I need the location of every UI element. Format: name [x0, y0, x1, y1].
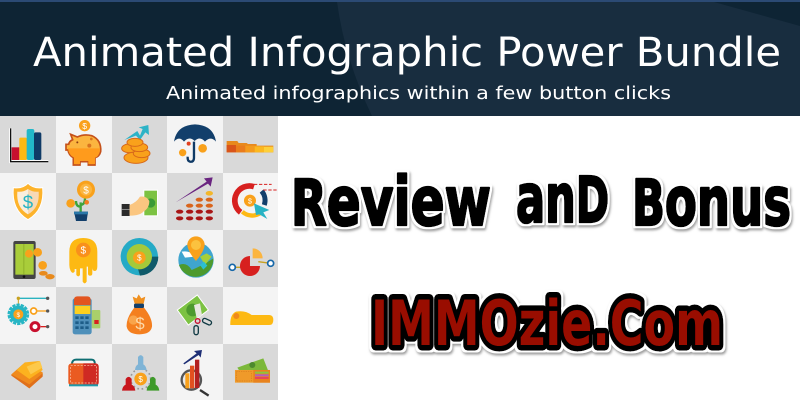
icon: gold bars	[11, 361, 43, 388]
icon: shield	[13, 183, 43, 220]
icon group: top rows	[11, 120, 277, 221]
icon: linked gears: $	[16, 312, 20, 319]
icon: hand holding money	[122, 190, 158, 216]
icon: gears cycle: $	[137, 254, 142, 263]
icon: piggy bank	[66, 120, 101, 165]
icon: magnifier and chart	[182, 350, 209, 396]
icon: growth arrow with dots	[176, 177, 213, 220]
panel: icon grid background	[0, 116, 278, 400]
icon: umbrella and coins	[174, 124, 216, 162]
icon: dripping coin: $	[81, 245, 87, 256]
heading: Review and Bonus: Review	[291, 163, 491, 242]
icon: coin plant	[66, 181, 95, 221]
icon: shield: $	[23, 191, 34, 212]
icon: piggy bank: $	[82, 121, 87, 131]
subtitle: Animated infographics within a few button clicks	[166, 83, 671, 104]
icon: phone with coins	[13, 241, 55, 279]
icon: yellow shape	[230, 311, 273, 325]
icon: dripping coin	[69, 238, 97, 283]
icon: money bag: $	[135, 314, 145, 333]
icon: wallet with money	[235, 358, 270, 383]
icon: ring chart with coin: $	[248, 196, 252, 205]
icon: stepped bars	[227, 141, 273, 152]
icon: money on chain	[177, 295, 212, 335]
heading: Review and Bonus	[291, 160, 791, 242]
icon: money bag	[127, 294, 152, 334]
icon: coin plant: $	[83, 185, 89, 196]
icon: pie with nodes	[229, 248, 274, 276]
icon: card terminal	[73, 296, 100, 334]
icon: linked gears	[9, 297, 49, 331]
icon: globe with pin	[178, 236, 214, 278]
icon: ring chart with coin	[235, 184, 277, 219]
header banner	[0, 0, 800, 116]
icon group: lower rows	[9, 236, 274, 396]
icon: people around coin	[122, 355, 159, 391]
icon: coin purse	[68, 360, 99, 386]
icon: coin stack with arrow	[122, 125, 150, 163]
icon: gears cycle	[121, 238, 158, 276]
icon: people around coin: $	[138, 375, 143, 384]
title: Animated Infographic Power Bundle	[33, 30, 781, 76]
icon: bar chart	[11, 128, 48, 162]
heading: Review and Bonus: anD	[516, 160, 609, 239]
